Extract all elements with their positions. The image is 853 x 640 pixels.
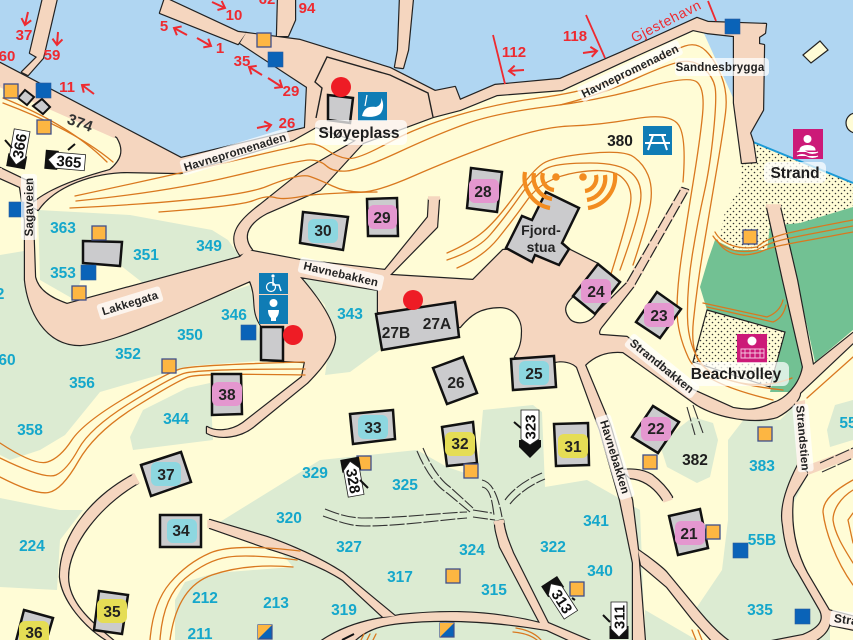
road name: Havnebakken south: Havnebakken (597, 419, 631, 496)
teal plot numbers: 346 (221, 307, 247, 324)
signpost: 323: 323 (522, 414, 540, 440)
label: Sløyeplass (315, 120, 407, 145)
red berth numbers: 37 (16, 27, 32, 44)
small sheds (18, 90, 50, 114)
icon: wheelchair (259, 273, 288, 294)
icon: picnic table (643, 126, 672, 155)
icon: left signal arcs (525, 172, 560, 208)
dark green terrain areas (700, 205, 853, 392)
building: 33 (350, 410, 395, 444)
icon: right signal arcs (579, 173, 615, 208)
teal plot numbers: 351 (133, 247, 159, 264)
teal plot numbers: 212 (192, 590, 218, 607)
building: 32: 32 (451, 436, 469, 453)
red berth numbers: 1 (216, 40, 224, 57)
label: Beachvolley: Beachvolley (691, 366, 782, 383)
beach shoreline (753, 142, 853, 183)
site number 374: 374 (65, 111, 95, 136)
label: Beachvolley (691, 362, 789, 386)
teal plot numbers: 343 (337, 306, 363, 323)
building: Fjordstua: stua (527, 239, 556, 255)
teal plot numbers: 363 (50, 220, 76, 237)
signpost: 328 (340, 457, 365, 497)
building: 22 (632, 406, 679, 453)
red berth arrows (25, 2, 597, 128)
red berth numbers: 59 (44, 47, 60, 64)
black site numbers: 380 (607, 133, 633, 150)
signpost: 311 (610, 602, 628, 639)
teal plot numbers: 327 (336, 539, 362, 556)
building: 23 (636, 292, 681, 338)
teal plot numbers: 325 (392, 477, 418, 494)
red berth numbers: 26 (279, 115, 295, 132)
red berth numbers: 118 (563, 28, 587, 45)
building: 22: 22 (647, 421, 665, 438)
building: 34 (160, 515, 201, 547)
teal plot numbers: 358 (17, 422, 43, 439)
building: unnumbered by 351 (83, 241, 122, 266)
building: 31: 31 (564, 439, 582, 456)
icon: volleyball (737, 334, 767, 363)
teal plot numbers: 335 (747, 602, 773, 619)
building: 28: 28 (474, 184, 492, 201)
teal plot numbers: 349 (196, 238, 222, 255)
label: Strand: Strand (770, 165, 820, 182)
red berth numbers: 11 (59, 79, 75, 96)
red berth numbers: 112 (502, 44, 526, 61)
teal plot numbers (0, 220, 853, 640)
signpost: 366 (6, 129, 31, 169)
teal plot numbers: 213 (263, 595, 289, 612)
orange service markers (4, 33, 772, 596)
round island (846, 113, 853, 133)
teal plot numbers: 324 (459, 542, 485, 559)
label: Sløyeplass: Sløyeplass (318, 125, 400, 142)
red berth numbers: 10 (226, 7, 242, 24)
red berth numbers: 29 (283, 83, 299, 100)
label: Sandnesbrygga (675, 58, 769, 76)
building: 23: 23 (650, 308, 668, 325)
teal plot numbers: 383 (749, 458, 775, 475)
signpost: 311: 311 (612, 605, 628, 629)
red berth numbers: 94 (299, 0, 316, 17)
road name: Lakkegata: Lakkegata (101, 290, 160, 318)
signpost: 366: 366 (10, 132, 31, 160)
building: 32 (442, 422, 477, 466)
building: 36 (15, 610, 53, 640)
building: 29: 29 (373, 210, 391, 227)
building: 24: 24 (587, 284, 605, 301)
building: 26: 26 (447, 375, 465, 392)
building: 30 (300, 212, 348, 250)
half orange half blue markers (258, 623, 454, 639)
beachvolley court (693, 310, 785, 387)
icon: fish cleaning (358, 92, 387, 121)
dashed edge gaps on the north-east road (627, 188, 688, 287)
dashed paths (323, 405, 853, 526)
building: 37 (141, 452, 191, 496)
signpost: 365 (44, 150, 86, 172)
icon: toilet (259, 295, 288, 324)
teal plot numbers: 341 (583, 513, 609, 530)
label: Strand (764, 162, 826, 183)
building: 34: 34 (172, 523, 190, 540)
pedestrian strips (795, 400, 853, 475)
island (803, 41, 828, 63)
building: 35 (94, 591, 128, 634)
signpost: 365: 365 (56, 153, 82, 172)
building: 21 (669, 509, 708, 555)
road name: Havnebakken: Havnebakken (302, 261, 379, 289)
label: Sandnesbrygga: Sandnesbrygga (676, 62, 765, 74)
teal plot numbers: 344 (163, 411, 189, 428)
building: 27A and 27B (376, 302, 459, 350)
teal plot numbers: 319 (331, 602, 357, 619)
building: 31 (554, 423, 589, 466)
building: 29 (367, 198, 398, 236)
building: 28 (467, 168, 502, 212)
building: 27A and 27B: 27A (423, 316, 451, 333)
teal plot numbers: 329 (302, 465, 328, 482)
building: 26 (433, 357, 477, 404)
teal plot numbers: 356 (69, 375, 95, 392)
building: 38 (212, 374, 242, 415)
building: 27A and 27B: 27B (382, 325, 410, 342)
building: WC (261, 327, 283, 361)
building: 25: 25 (525, 366, 543, 383)
red berth numbers: 5 (160, 18, 168, 35)
signpost stubs (5, 140, 610, 640)
teal plot numbers: 320 (276, 510, 302, 527)
signpost: 323 (519, 410, 541, 458)
building: 24 (573, 264, 620, 314)
teal plot numbers: 352 (115, 346, 141, 363)
building: 37: 37 (157, 467, 175, 484)
beach stippled area (720, 142, 853, 250)
building: Fjordstua: Fjord- (521, 222, 561, 238)
teal plot numbers: 350 (177, 327, 203, 344)
road name: Havnepromenaden east: Havnepromenaden (580, 43, 681, 101)
red water boundary lines (493, 1, 716, 84)
red berth numbers (0, 0, 587, 132)
building: 38: 38 (218, 387, 236, 404)
road name: Havnepromenaden west: Havnepromenaden (183, 132, 288, 174)
signpost: 313 (541, 576, 579, 620)
black site numbers (607, 133, 708, 469)
signpost: 313: 313 (547, 587, 575, 617)
building: 35: 35 (103, 604, 121, 621)
building: 30: 30 (314, 223, 332, 240)
road name: Sagaveien (21, 174, 37, 240)
teal plot numbers: 353 (50, 265, 76, 282)
light green terrain areas (0, 210, 853, 640)
black site numbers: 382 (682, 452, 708, 469)
icon: swimming (793, 129, 823, 159)
plaza outline at Sløyeplass (315, 57, 433, 118)
red berth numbers: 35 (234, 53, 250, 70)
building: 25 (511, 356, 556, 390)
road name: Strandbakken: Strandbakken (627, 337, 696, 396)
building: Sløyeplass shed (328, 95, 353, 123)
teal plot numbers: 340 (587, 563, 613, 580)
road name: Sagaveien: Sagaveien (24, 178, 36, 236)
open road ends (0, 86, 781, 528)
red entrance dots (283, 77, 423, 345)
building: 21: 21 (680, 526, 698, 543)
road name: Strandstien: Strandstien (793, 405, 811, 471)
building: 33: 33 (364, 420, 382, 437)
teal plot numbers: 315 (481, 582, 507, 599)
teal plot numbers: 224 (19, 538, 45, 555)
teal plot numbers: 322 (540, 539, 566, 556)
teal plot numbers: 317 (387, 569, 413, 586)
signpost: 328: 328 (342, 467, 363, 495)
road name: Strandstien east (829, 610, 853, 630)
building: Fjordstua (506, 192, 579, 265)
teal plot numbers: 55B (748, 532, 776, 549)
